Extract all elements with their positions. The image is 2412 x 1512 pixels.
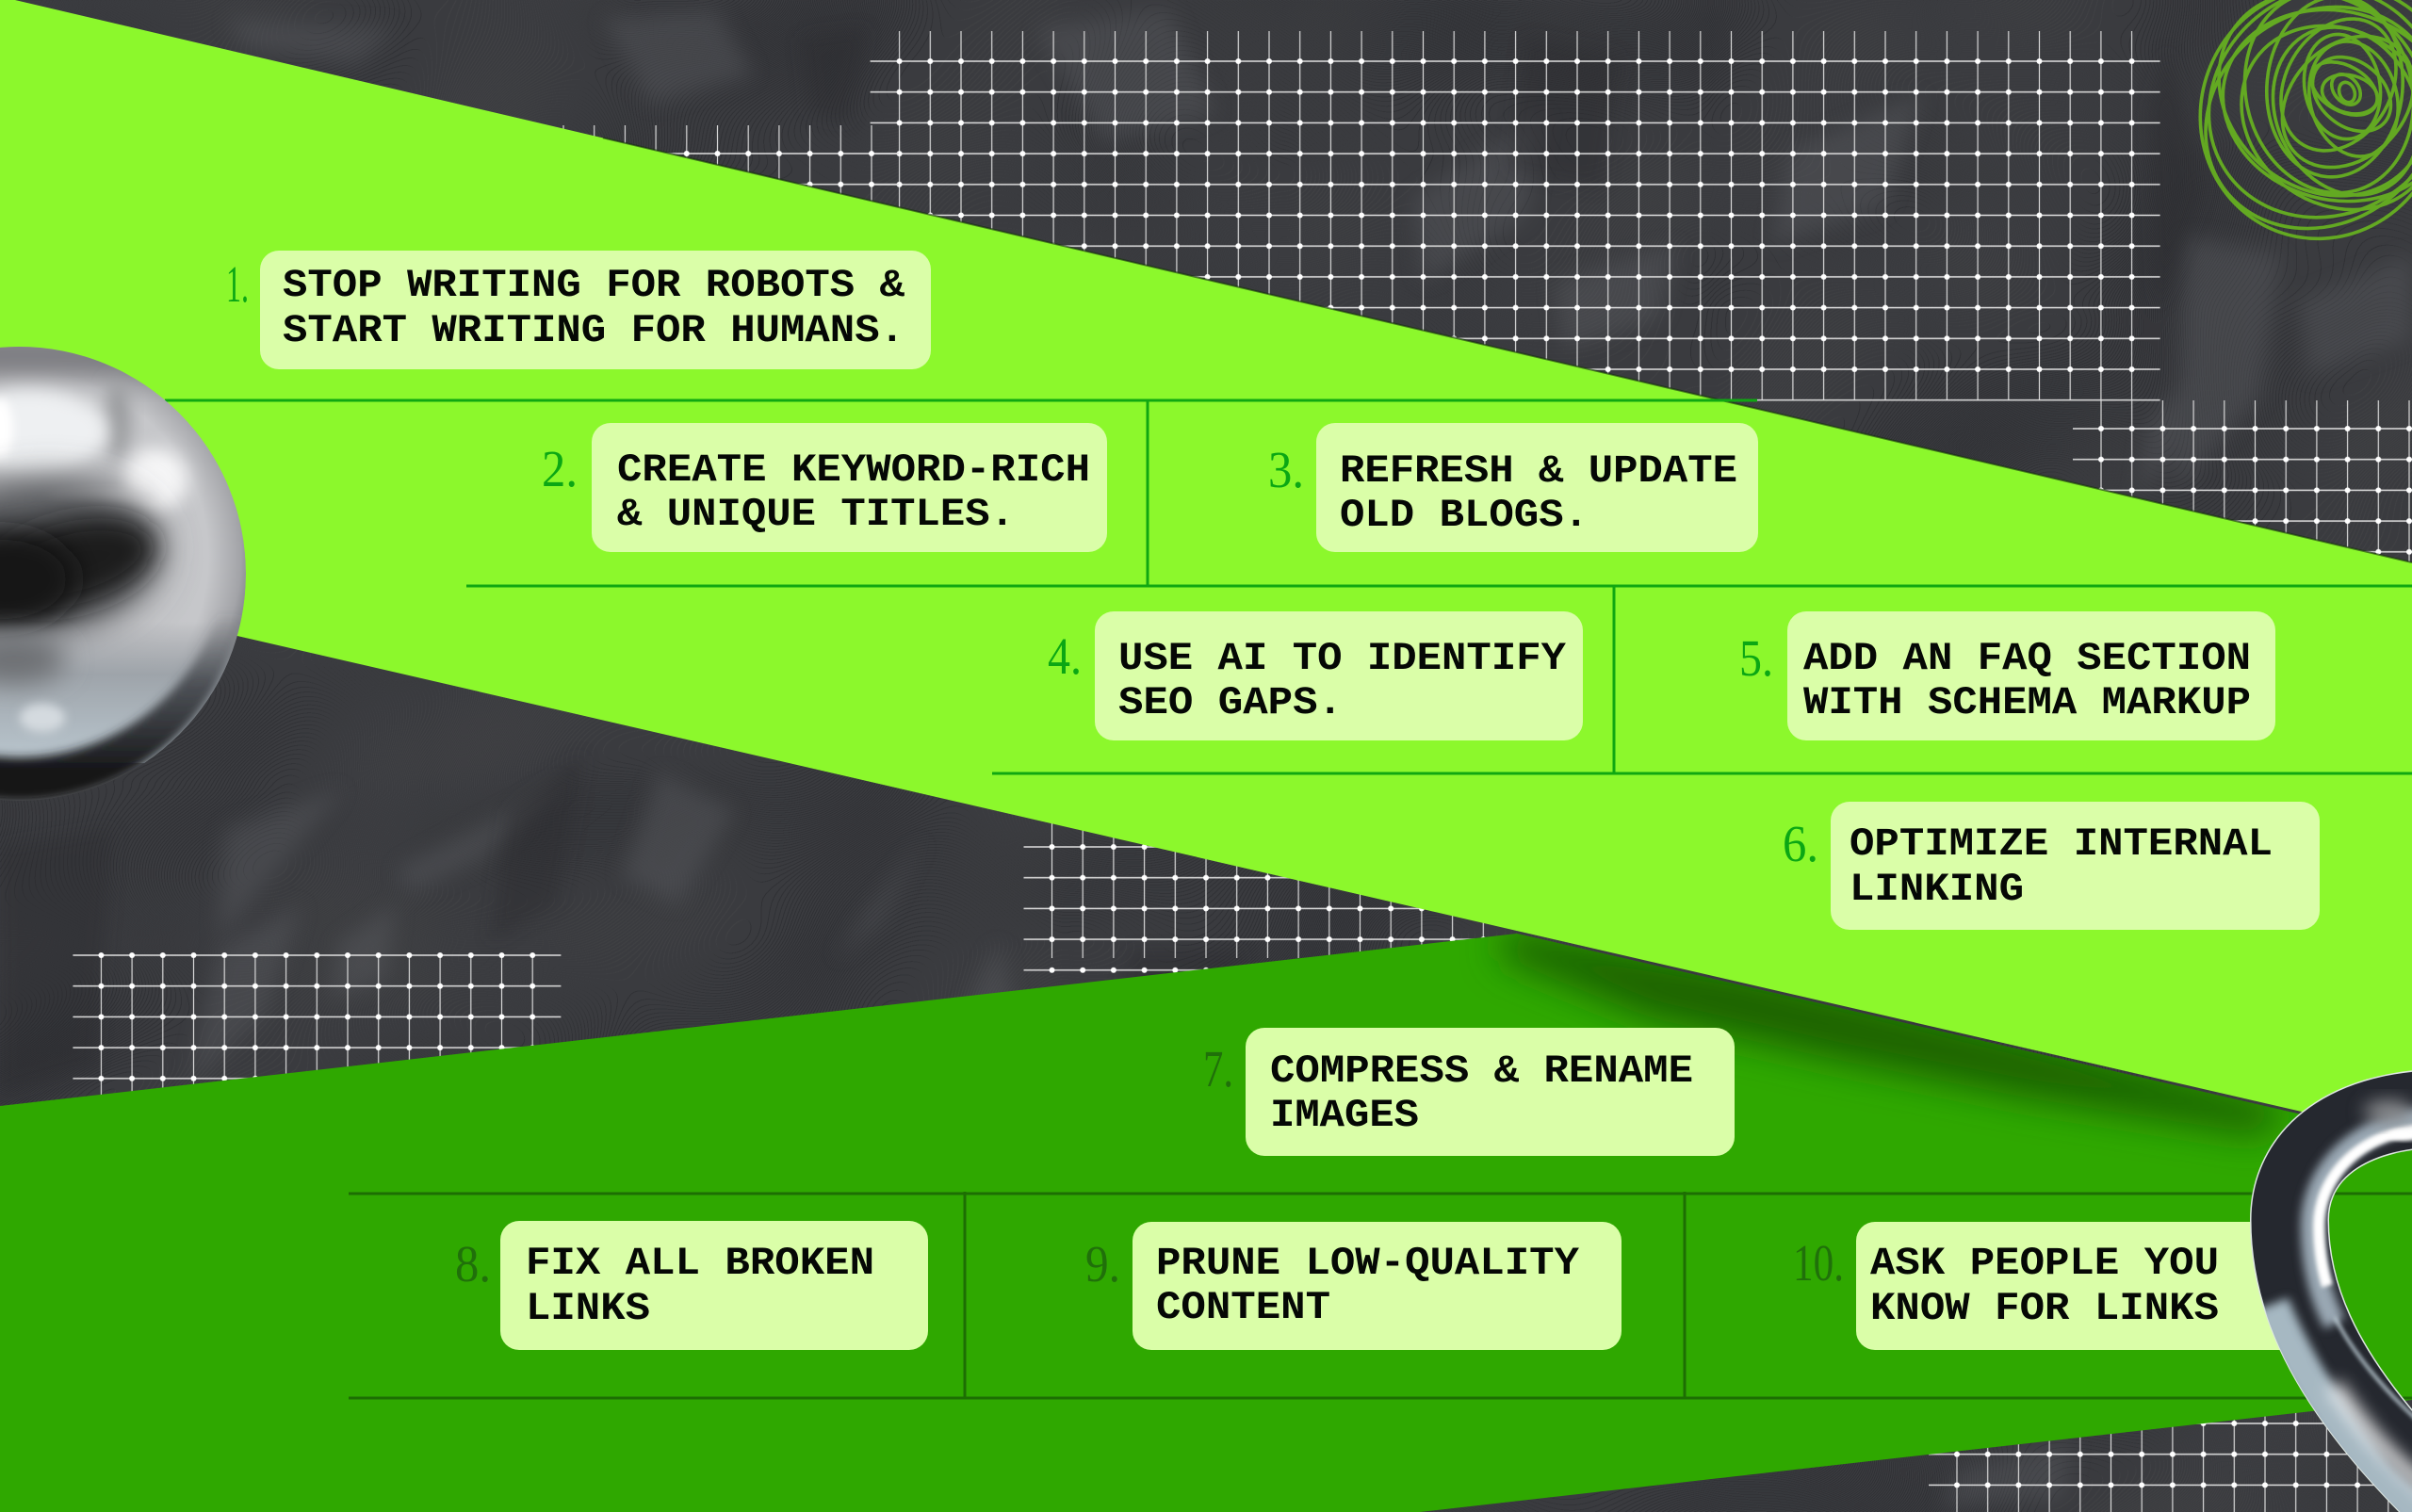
item 5: WITH SCHEMA MARKUP bbox=[1803, 680, 2251, 725]
item 9: CONTENT bbox=[1156, 1285, 1330, 1330]
divider lines: bright band bbox=[165, 400, 2412, 773]
grid: top main bbox=[871, 31, 2160, 401]
item 10 bbox=[1793, 1222, 2322, 1350]
item 10: 10. bbox=[1793, 1234, 1844, 1292]
item 4: USE AI TO IDENTIFY bbox=[1118, 636, 1567, 681]
scribble bbox=[2162, 0, 2412, 273]
item 8: FIX ALL BROKEN bbox=[526, 1241, 874, 1286]
panel: bright green upper band bbox=[0, 0, 2412, 1137]
item 5 bbox=[1739, 611, 2275, 740]
grid: bottom right bbox=[1929, 1395, 2412, 1512]
item 3: OLD BLOGS. bbox=[1340, 493, 1589, 538]
item 4: 4. bbox=[1048, 627, 1082, 685]
item 5: ADD AN FAQ SECTION bbox=[1803, 636, 2251, 681]
item 6: 6. bbox=[1783, 815, 1818, 872]
item 4 bbox=[1048, 611, 1583, 740]
item 9 bbox=[1085, 1222, 1622, 1350]
item 9: PRUNE LOW-QUALITY bbox=[1156, 1241, 1580, 1286]
item 3: 3. bbox=[1268, 441, 1304, 498]
item 7: IMAGES bbox=[1270, 1093, 1419, 1138]
icon: chrome ring bbox=[2271, 1100, 2412, 1512]
item 2: & UNIQUE TITLES. bbox=[617, 492, 1015, 537]
item 8: 8. bbox=[455, 1235, 491, 1293]
item 2: CREATE KEYWORD-RICH bbox=[617, 447, 1090, 493]
item 1: START WRITING FOR HUMANS. bbox=[283, 308, 904, 353]
item 8: LINKS bbox=[526, 1286, 650, 1331]
item 3: REFRESH & UPDATE bbox=[1340, 448, 1737, 494]
item 10: ASK PEOPLE YOU bbox=[1870, 1241, 2219, 1286]
item 5: 5. bbox=[1739, 629, 1773, 687]
grid: top left extension bbox=[560, 125, 899, 295]
item 1: 1. bbox=[226, 255, 249, 313]
item 2 bbox=[542, 423, 1107, 552]
icon: chrome sphere bbox=[0, 347, 246, 801]
item 7: 7. bbox=[1203, 1040, 1233, 1097]
item 3 bbox=[1268, 423, 1758, 552]
grid: right bbox=[2073, 400, 2412, 589]
item 2: 2. bbox=[542, 440, 578, 497]
item 10: KNOW FOR LINKS bbox=[1870, 1286, 2219, 1331]
item 6: OPTIMIZE INTERNAL bbox=[1850, 821, 2273, 867]
item 7 bbox=[1203, 1028, 1735, 1156]
divider lines: dark band bbox=[349, 1192, 2412, 1398]
item 4: SEO GAPS. bbox=[1118, 680, 1343, 725]
grid: middle bbox=[1023, 819, 1513, 974]
item 1 bbox=[226, 251, 931, 369]
item 6 bbox=[1783, 802, 2320, 930]
item 9: 9. bbox=[1085, 1235, 1120, 1293]
panel: dark green lower band bbox=[0, 928, 2412, 1512]
item 8 bbox=[455, 1221, 928, 1350]
item 1: STOP WRITING FOR ROBOTS & bbox=[283, 263, 905, 308]
item 6: LINKING bbox=[1850, 867, 2024, 912]
item 7: COMPRESS & RENAME bbox=[1270, 1049, 1693, 1094]
grid: lower left bbox=[73, 951, 561, 1114]
